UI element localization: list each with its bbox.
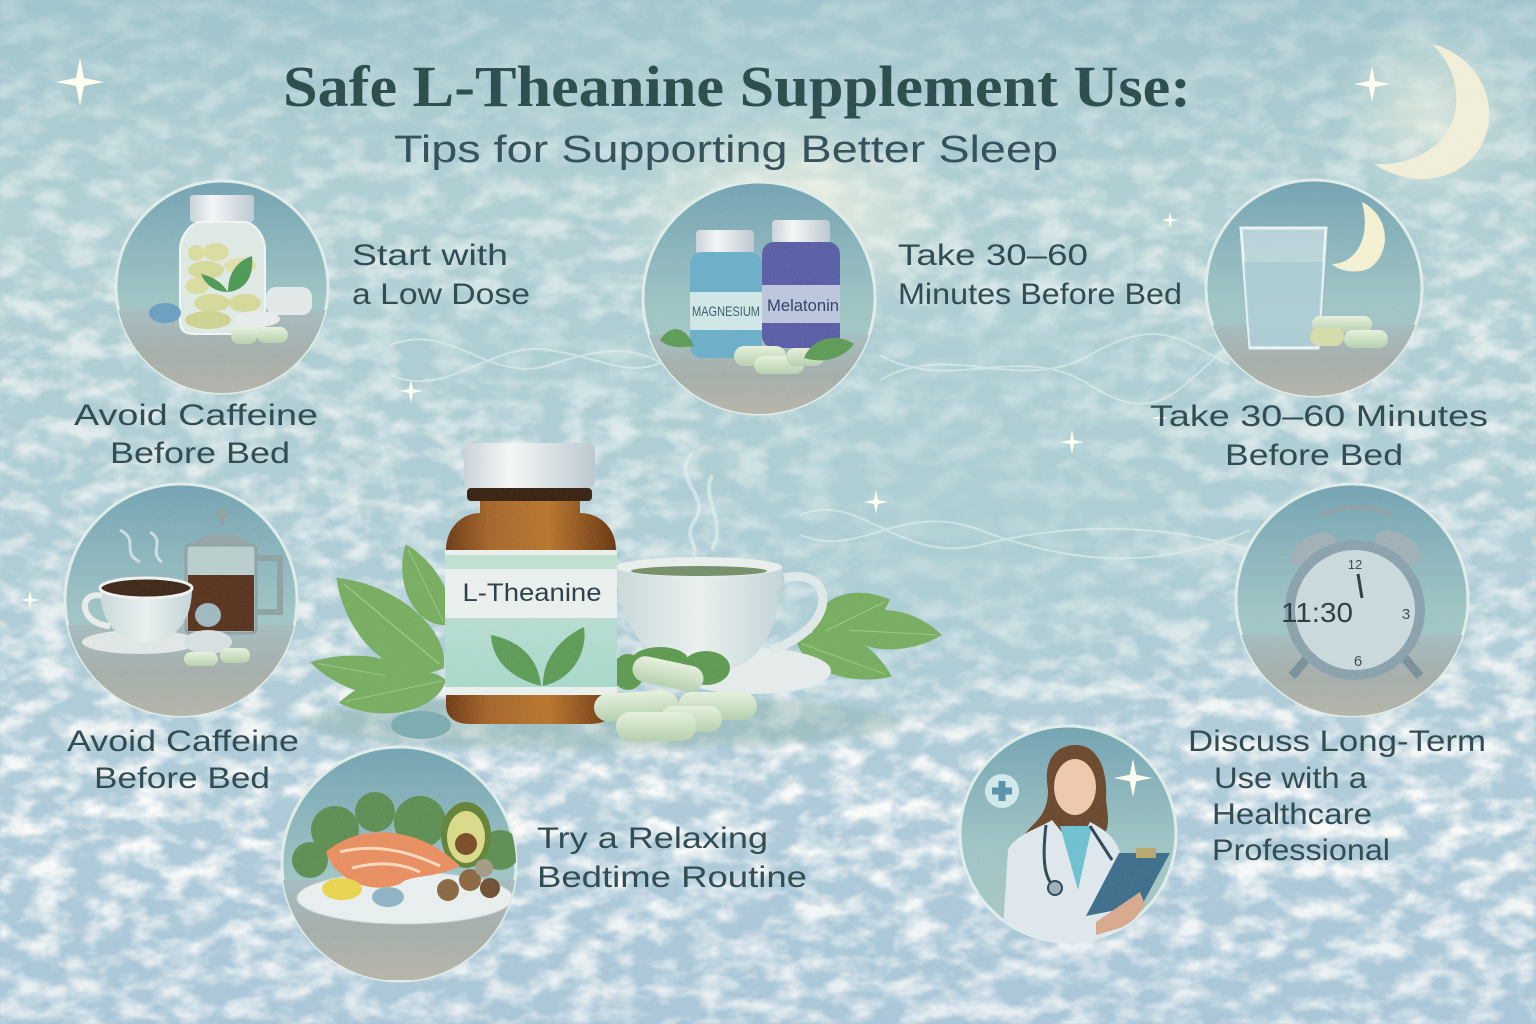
text: discuss long-term use: Healthcare: [1212, 798, 1372, 831]
text: discuss long-term use: Use with a: [1214, 762, 1367, 795]
icon: magnesium bottle: MAGNESIUM: [692, 303, 760, 319]
text: take 30-60 minutes before bed: Take 30–60: [898, 239, 1088, 272]
icon: small leaves behind capsules: [612, 647, 730, 690]
text: start with a low dose: [352, 239, 530, 311]
icon: doctor: [1002, 745, 1170, 945]
title: Safe L-Theanine Supplement Use:: [283, 54, 1191, 119]
icon: melatonin bottle: Melatonin: [767, 296, 839, 315]
icon: capsule bottle: [180, 195, 265, 334]
icon: alarm clock: 12: [1348, 557, 1362, 572]
subtitle: Tips for Supporting Better Sleep: [394, 129, 1058, 171]
text: try a relaxing bedtime routine: Try a Relaxing: [537, 822, 768, 855]
text: take 30-60 minutes before bed: Minutes Before Bed: [898, 278, 1182, 311]
text: discuss long-term use: [1188, 725, 1486, 867]
text: take 30-60 minutes before bed: [898, 239, 1182, 311]
icon: melatonin bottle: [762, 220, 840, 348]
text: try a relaxing bedtime routine: [537, 822, 807, 894]
icon: french press: [186, 508, 280, 633]
sparkles: [20, 58, 1390, 610]
icon: medical cross badge: [985, 774, 1019, 808]
panel: healthcare professional circle: [960, 726, 1176, 945]
icon: alarm clock: [1281, 508, 1427, 680]
icon: alarm clock: 3: [1402, 606, 1410, 623]
icon: alarm clock: 11:30: [1281, 597, 1353, 628]
icon: avocado: [441, 802, 491, 868]
text: avoid caffeine heading left: Avoid Caffeine: [74, 399, 318, 432]
icon: leaves around bottle: [307, 537, 943, 724]
text: try a relaxing bedtime routine: Bedtime Routine: [537, 861, 807, 894]
text: start with a low dose: a Low Dose: [352, 278, 530, 311]
text: discuss long-term use: Discuss Long-Term: [1188, 725, 1486, 758]
icon: table mist: [300, 694, 900, 750]
text: start with a low dose: Start with: [352, 239, 508, 272]
text: avoid caffeine heading left: [74, 399, 318, 470]
icon: glass of water: [1241, 228, 1326, 348]
panel: healthy plate circle: [280, 747, 520, 981]
icon: small moon: [1332, 202, 1385, 271]
icon: capsules: [391, 654, 757, 741]
icon: crescent moon: [1335, 17, 1525, 207]
icon: tea cup: [616, 557, 831, 694]
panel: alarm clock circle: [1230, 484, 1470, 720]
panel: magnesium and melatonin circle: [640, 182, 880, 415]
text: avoid caffeine lower: Avoid Caffeine: [67, 725, 299, 758]
hero: L-Theanine bottle, cup, leaves and pills: [300, 443, 943, 750]
DNA strands: [390, 334, 1250, 558]
icon: amber bottle: [445, 443, 617, 724]
text: avoid caffeine lower: [67, 725, 299, 795]
panel: coffee circle: [60, 484, 300, 720]
icon: alarm clock: 6: [1354, 653, 1362, 670]
icon: amber bottle: L-Theanine: [462, 579, 602, 607]
text: take 30-60 minutes right: [1150, 400, 1488, 472]
icon: salmon: [326, 832, 460, 888]
icon: plate: [297, 872, 513, 924]
panel: water glass circle: [1200, 180, 1430, 400]
text: take 30-60 minutes right: Before Bed: [1225, 439, 1403, 472]
text: discuss long-term use: Professional: [1212, 834, 1390, 867]
text: avoid caffeine lower: Before Bed: [94, 762, 270, 795]
text: take 30-60 minutes right: Take 30–60 Minutes: [1150, 400, 1488, 433]
text: avoid caffeine heading left: Before Bed: [110, 437, 290, 470]
icon: coffee cup: [82, 578, 198, 654]
icon: magnesium bottle: [690, 230, 762, 358]
steam: [685, 453, 717, 556]
icon: salad greens: [292, 792, 520, 878]
panel: low dose circle: [110, 181, 340, 400]
